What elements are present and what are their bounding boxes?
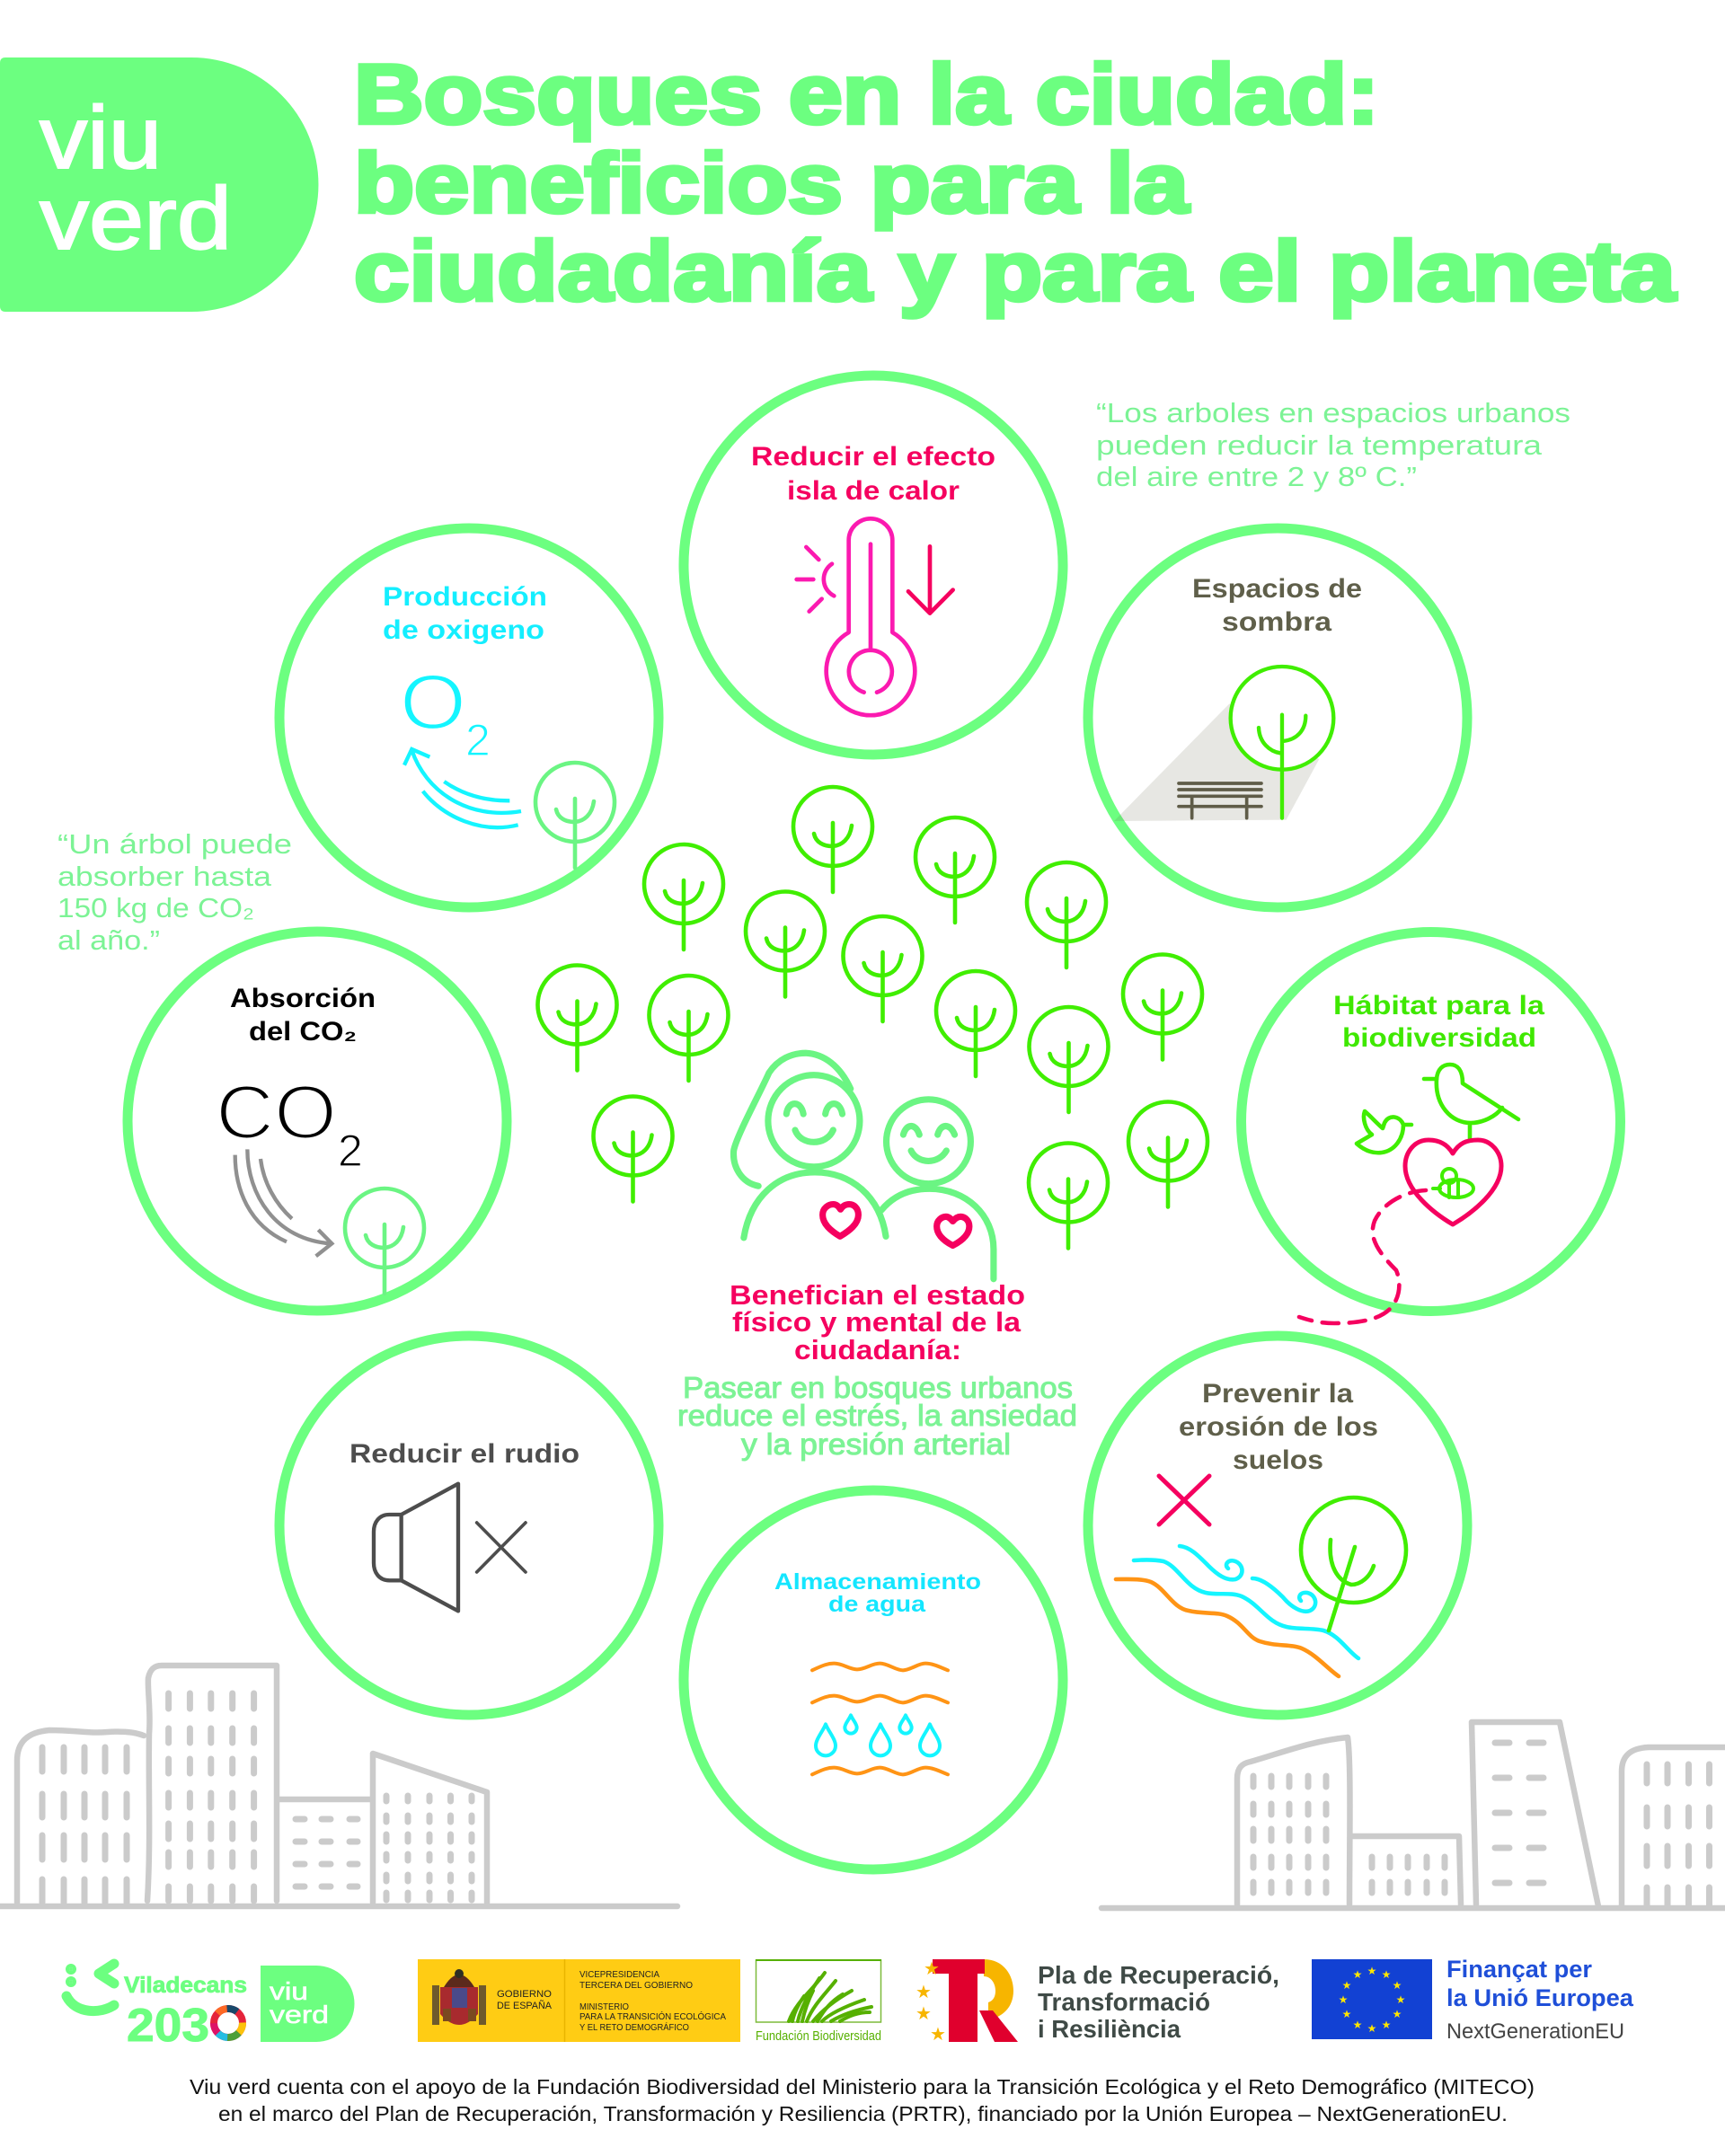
title: Bosques en la ciudad: bbox=[354, 47, 1379, 141]
panel: agua bbox=[684, 1490, 1063, 1869]
heading: biodiversidad bbox=[1333, 991, 1544, 1053]
panel: oxigeno bbox=[279, 528, 659, 907]
logo: Plan de Recuperación: Transformació bbox=[1038, 1988, 1210, 2016]
heading: oxigeno: Producción bbox=[383, 582, 547, 612]
logo pill: viu verd bbox=[0, 57, 318, 312]
icon: oxygen arrows bbox=[404, 749, 521, 827]
title bbox=[354, 47, 1676, 318]
icon: thermometer bbox=[797, 518, 953, 715]
icon: EU stars: ★ bbox=[1396, 1993, 1405, 2006]
logo: Gobierno de España: TERCERA DEL GOBIERNO bbox=[579, 1980, 693, 1991]
heading: erosion: Prevenir la bbox=[1202, 1379, 1353, 1409]
logo: Gobierno de España: Y EL RETO DEMOGRÁFICO bbox=[579, 2021, 689, 2033]
dashed flight path bbox=[1299, 1190, 1426, 1323]
logo: Unión Europea: NextGenerationEU bbox=[1446, 2019, 1624, 2044]
footer text: en el marco del Plan de Recuperación, Transformación y Resiliencia (PRTR), financiado por la Unión Europea – NextGenerationEU. bbox=[218, 2102, 1508, 2125]
text: beneficios estado fisico: Benefician el estado bbox=[730, 1279, 1025, 1311]
panel: erosion bbox=[1088, 1336, 1467, 1715]
icon: EU stars: ★ bbox=[1382, 2019, 1391, 2031]
skyline left bbox=[0, 1666, 677, 1906]
icon: stars bbox=[916, 1959, 946, 2045]
icon: muted speaker bbox=[374, 1484, 526, 1611]
heading: CO2 bbox=[230, 984, 376, 1047]
logo: Plan de Recuperación bbox=[916, 1959, 1279, 2045]
logo: Gobierno de España bbox=[418, 1959, 740, 2042]
icon: stars: ★ bbox=[930, 2025, 946, 2045]
logo: Plan de Recuperación: Pla de Recuperació, bbox=[1038, 1961, 1279, 1989]
logo: Fundación Biodiversidad bbox=[756, 1960, 881, 2044]
icon: EU stars: ★ bbox=[1353, 1968, 1362, 1981]
icon: EU stars: ★ bbox=[1342, 1979, 1351, 1992]
text: pasear en bosques: y la presión arterial bbox=[741, 1427, 1011, 1461]
central forest of trees bbox=[537, 787, 1208, 1249]
quote: CO2: al año.” bbox=[58, 924, 160, 956]
icon: waves and drops bbox=[812, 1664, 948, 1774]
panel: sombra bbox=[1088, 528, 1467, 907]
icon: stars: ★ bbox=[916, 1983, 932, 2002]
icon: shade and bench bbox=[1114, 703, 1319, 821]
icon: tree bbox=[535, 763, 615, 868]
icon: stars: ★ bbox=[916, 2004, 932, 2024]
heading: oxigeno bbox=[383, 582, 547, 645]
text: beneficios estado fisico bbox=[730, 1279, 1025, 1365]
heading: agua: de agua bbox=[828, 1592, 926, 1617]
icon: EU stars: ★ bbox=[1393, 2008, 1402, 2020]
heading: CO2: del CO₂ bbox=[249, 1017, 357, 1047]
logo: Viladecans 2030: 203 bbox=[127, 2000, 209, 2052]
icon: water and soil lines bbox=[1116, 1546, 1358, 1676]
logo: Gobierno de España: PARA LA TRANSICIÓN ECOLÓGICA bbox=[579, 2010, 726, 2022]
logo: Fundación Biodiversidad: Fundación Biodiversidad bbox=[756, 2028, 881, 2044]
people illustration bbox=[733, 1053, 994, 1279]
heading: sombra: Espacios de bbox=[1192, 574, 1362, 604]
icon: tree bbox=[1231, 667, 1333, 818]
icon: O2 bbox=[400, 659, 491, 765]
quote: CO2: “Un árbol puede bbox=[58, 828, 292, 860]
heading: erosion: erosión de los bbox=[1179, 1412, 1378, 1442]
icon: Viladecans smile bbox=[66, 1964, 114, 2011]
logo: Plan de Recuperación: i Resiliència bbox=[1038, 2015, 1181, 2043]
icon: crest bbox=[432, 1969, 486, 2025]
logo: Unión Europea: la Unió Europea bbox=[1446, 1984, 1634, 2011]
title: beneficios para la bbox=[354, 136, 1190, 230]
icon: CO2 arrows bbox=[235, 1149, 332, 1256]
icon: EU stars bbox=[1339, 1965, 1405, 2035]
heading: oxigeno: de oxigeno bbox=[383, 615, 544, 645]
icon: EU stars: ★ bbox=[1367, 2022, 1376, 2035]
footer text: Viu verd cuenta con el apoyo de la Fundación Biodiversidad del Ministerio para la Transición Ecológica y el Reto Demográfico (MITECO) bbox=[190, 2075, 1535, 2099]
logo: Viladecans 2030 bbox=[66, 1964, 355, 2052]
text: beneficios estado fisico: ciudadanía: bbox=[794, 1334, 961, 1365]
icon: O2: 2 bbox=[465, 715, 491, 765]
panel: ruido bbox=[279, 1336, 659, 1715]
icon: tree bbox=[1301, 1498, 1406, 1630]
icon: cross bbox=[1159, 1476, 1209, 1524]
footer text bbox=[190, 2075, 1535, 2125]
heading: isla de calor: Reducir el efecto bbox=[751, 442, 995, 472]
heading: ruido: Reducir el rudio bbox=[349, 1439, 579, 1469]
icon: CO2 letters: 2 bbox=[338, 1126, 363, 1176]
heading: biodiversidad: biodiversidad bbox=[1342, 1023, 1536, 1053]
heading: biodiversidad: Hábitat para la bbox=[1333, 991, 1544, 1021]
icon: EU stars: ★ bbox=[1367, 1965, 1376, 1977]
logo: Unión Europea bbox=[1312, 1956, 1634, 2044]
logo: Gobierno de España: DE ESPAÑA bbox=[497, 2000, 553, 2011]
text: beneficios estado fisico: físico y mental de la bbox=[732, 1306, 1022, 1338]
icon: EU stars: ★ bbox=[1393, 1979, 1402, 1992]
icon: heart with bee bbox=[1405, 1140, 1501, 1224]
icon: SDG wheel bbox=[214, 2009, 243, 2037]
icon: EU stars: ★ bbox=[1342, 2008, 1351, 2020]
panel: CO2 bbox=[128, 932, 507, 1311]
icon: stars: ★ bbox=[924, 1959, 940, 1979]
heading: erosion bbox=[1179, 1379, 1378, 1475]
text: pasear en bosques: reduce el estrés, la ansiedad bbox=[677, 1399, 1077, 1432]
logo: Gobierno de España: VICEPRESIDENCIA bbox=[579, 1969, 659, 1980]
title: ciudadanía y para el planeta bbox=[354, 224, 1676, 318]
quote: temperatura bbox=[1096, 397, 1570, 492]
heading: sombra: sombra bbox=[1222, 607, 1331, 637]
quote: temperatura: pueden reducir la temperatura bbox=[1096, 429, 1543, 461]
logo pill: viu verd: viu bbox=[40, 88, 162, 187]
quote: CO2: absorber hasta bbox=[58, 861, 272, 892]
icon: EU stars: ★ bbox=[1353, 2019, 1362, 2031]
logo: Viladecans 2030: verd bbox=[270, 2001, 329, 2028]
icon: tree bbox=[345, 1188, 424, 1294]
icon: EU stars: ★ bbox=[1382, 1968, 1391, 1981]
panel: biodiversidad bbox=[1242, 932, 1621, 1323]
panel: isla de calor bbox=[684, 376, 1063, 755]
skyline right bbox=[1101, 1722, 1725, 1908]
text: pasear en bosques bbox=[677, 1371, 1077, 1461]
logo: Viladecans 2030: viu bbox=[270, 1977, 308, 2005]
icon: CO2 letters: CO bbox=[216, 1070, 337, 1154]
quote: temperatura: “Los arboles en espacios urbanos bbox=[1096, 397, 1570, 429]
heading: erosion: suelos bbox=[1233, 1445, 1323, 1475]
logo pill: viu verd: verd bbox=[40, 169, 232, 268]
heading: agua bbox=[774, 1569, 981, 1617]
logo: Unión Europea: Finançat per bbox=[1446, 1956, 1592, 1983]
heading: sombra bbox=[1192, 574, 1362, 637]
heading: agua: Almacenamiento bbox=[774, 1569, 981, 1595]
icon: CO2 letters bbox=[216, 1070, 363, 1176]
icon: grass bbox=[789, 1973, 871, 2021]
logo: Gobierno de España: GOBIERNO bbox=[497, 1989, 552, 2000]
icon: O2: O bbox=[400, 659, 466, 746]
quote: temperatura: del aire entre 2 y 8º C.” bbox=[1096, 461, 1417, 492]
heading: isla de calor bbox=[751, 442, 995, 506]
icon: EU stars: ★ bbox=[1339, 1993, 1348, 2006]
text: pasear en bosques: Pasear en bosques urbanos bbox=[683, 1371, 1073, 1404]
quote: CO2: 150 kg de CO₂ bbox=[58, 892, 254, 923]
logo: Gobierno de España: MINISTERIO bbox=[579, 2001, 629, 2012]
heading: CO2: Absorción bbox=[230, 984, 376, 1013]
logo: Viladecans 2030: Viladecans bbox=[124, 1973, 247, 1998]
quote: CO2 bbox=[58, 828, 292, 956]
heading: isla de calor: isla de calor bbox=[787, 476, 960, 506]
icon: birds bbox=[1357, 1065, 1518, 1153]
